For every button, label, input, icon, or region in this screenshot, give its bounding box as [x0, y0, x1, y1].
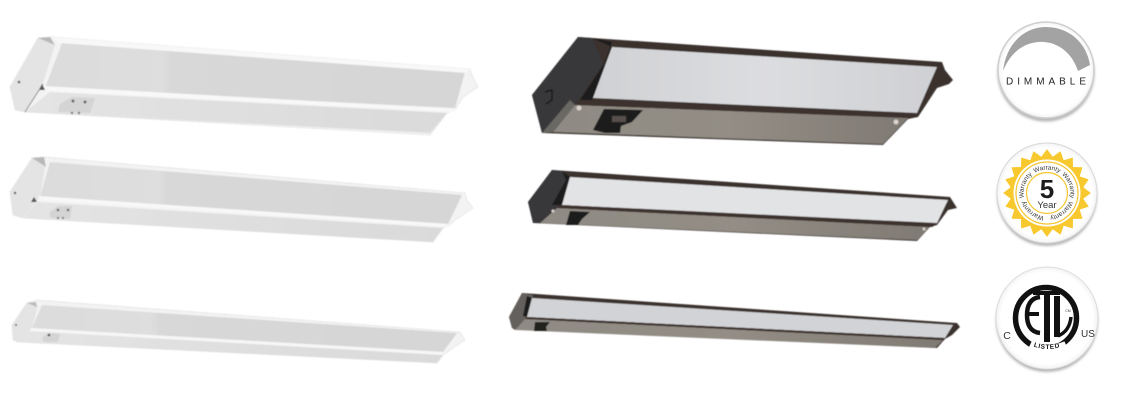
cm mark: CM — [1065, 309, 1071, 313]
US mark: US — [1081, 329, 1095, 340]
white light, medium — [10, 157, 473, 242]
listed label — [1030, 345, 1066, 349]
badge: ETL listed: LISTED — [1034, 342, 1059, 349]
white light, large — [10, 37, 478, 135]
five: 5 — [1040, 174, 1054, 204]
white light, slim — [12, 300, 465, 363]
bronze light, slim — [509, 293, 960, 348]
badge: 5 year warranty — [996, 142, 1098, 248]
badge: ETL listed — [994, 266, 1100, 374]
bronze light, large — [532, 37, 953, 145]
bronze light, medium — [528, 170, 957, 241]
C mark: C — [1003, 330, 1011, 342]
icon: yellow seal — [1003, 149, 1091, 237]
ETL letters — [1027, 293, 1071, 342]
icon: ETL ring — [1016, 288, 1076, 348]
year: Year — [1037, 200, 1057, 211]
icon: dimmer arc — [1003, 27, 1090, 71]
dimmable label: DIMMABLE — [1006, 76, 1086, 88]
warranty ring text: Warranty Warranty Warranty Warranty Warranty — [1019, 166, 1075, 221]
badge: dimmable — [998, 22, 1094, 122]
